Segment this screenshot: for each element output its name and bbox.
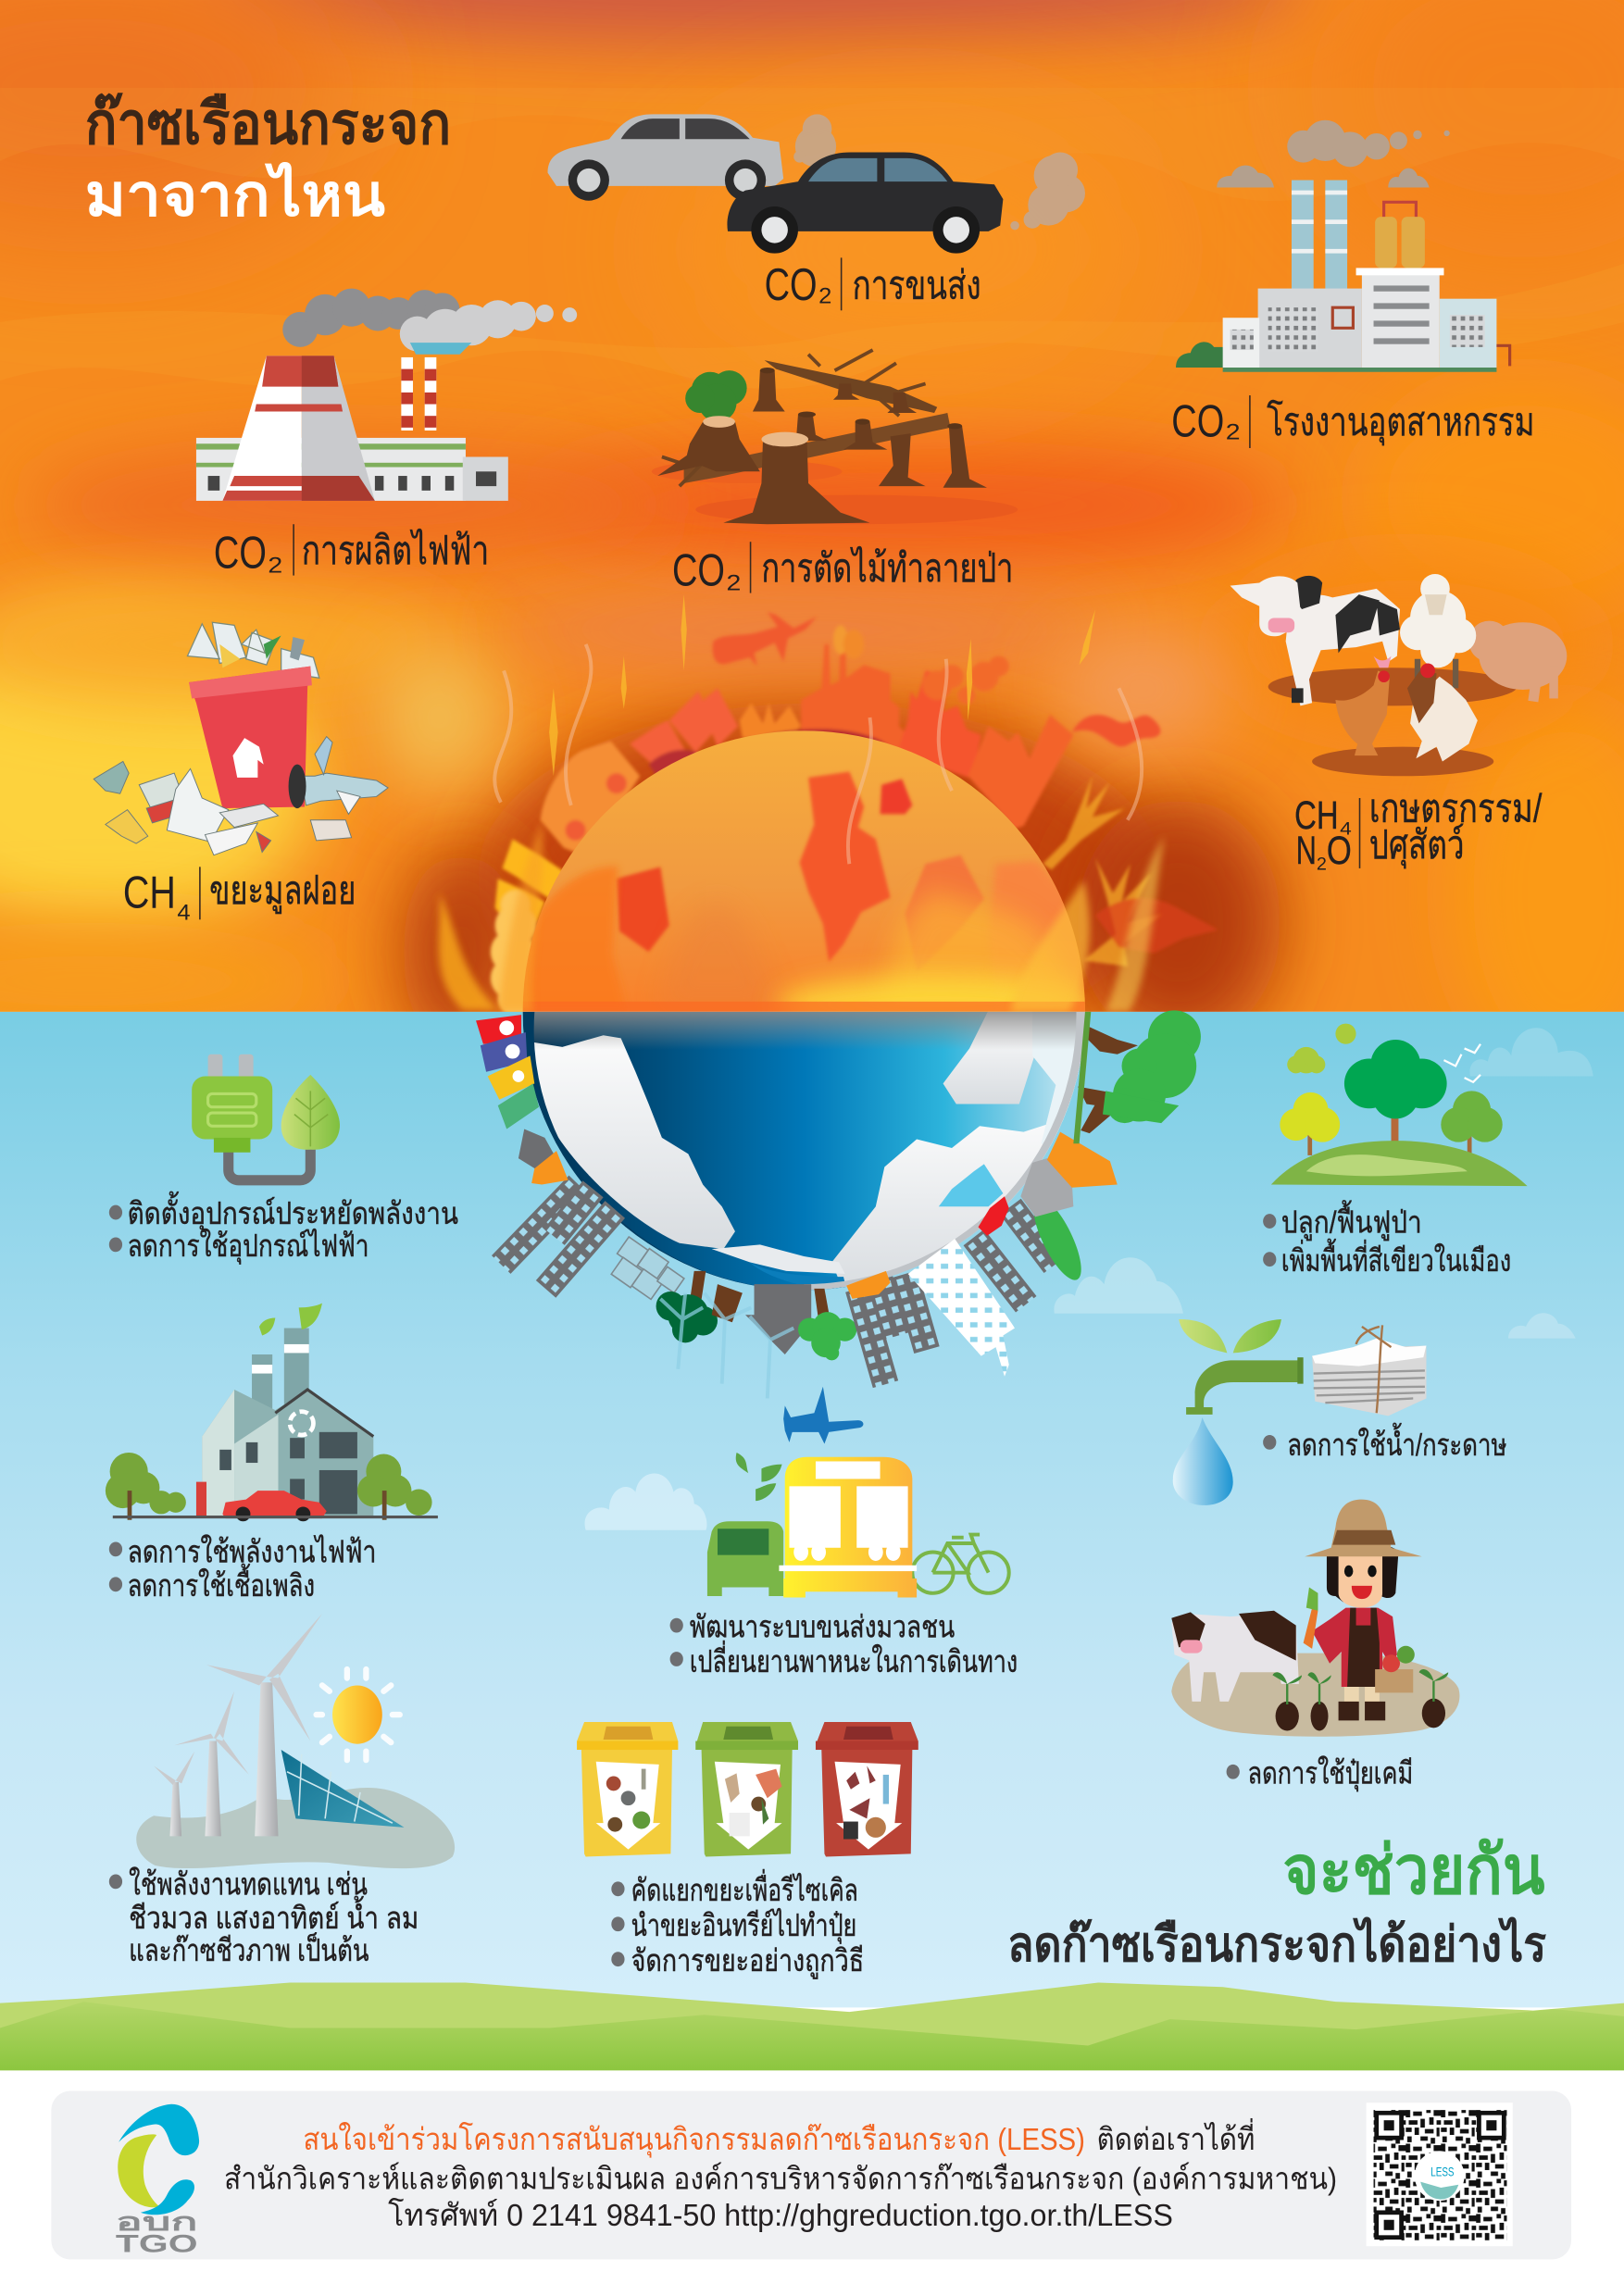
label: waste: ขยะมูลฝอย: [209, 868, 356, 915]
icon: industrial factory: [1176, 120, 1510, 372]
solar panels: [611, 1237, 684, 1299]
yellow bin: [577, 1722, 678, 1856]
label: agriculture and livestock: CH: [1294, 793, 1339, 838]
text: reduce electricity and fuel: ลดการใช้เชื้อเพลิง: [128, 1563, 315, 1603]
label: agriculture and livestock: O: [1327, 829, 1352, 873]
label: transport: การขนส่ง: [852, 264, 981, 308]
pig: [1468, 621, 1567, 702]
flames and heat wisps: [439, 594, 1164, 1012]
cow: [1230, 576, 1400, 705]
icon: power plant: [196, 289, 577, 501]
contact text: สำนักวิเคราะห์และติดตามประเมินผล องค์การบริหารจัดการก๊าซเรือนกระจก (องค์การมหาชน): [224, 2163, 1337, 2197]
footer panel: [51, 2091, 1571, 2259]
QR code: LESS: [1430, 2165, 1455, 2179]
sky clouds: [585, 1028, 1593, 1530]
orange car on globe: [846, 1271, 891, 1299]
contact text: โทรศัพท์ 0 2141 9841-50 http://ghgreduction.tgo.or.th/LESS: [388, 2198, 1173, 2233]
buildings: bottom: [845, 1270, 940, 1388]
text: public transport: [670, 1610, 1018, 1679]
faint turbines below globe: [660, 1293, 793, 1398]
label: electricity: [214, 524, 489, 579]
label: agriculture and livestock: ปศุสัตว์: [1369, 823, 1465, 869]
text: waste sorting: จัดการขยะอย่างถูกวิธี: [631, 1944, 864, 1979]
gray house: [745, 1284, 811, 1354]
label: deforestation: CO: [672, 546, 725, 596]
text: renewable energy: [109, 1867, 418, 1968]
farmer figure: [1305, 1500, 1422, 1720]
icon: deforestation stumps: [652, 350, 1018, 524]
TGO logo: TGO: [116, 2230, 198, 2258]
text: reduce electricity and fuel: ลดการใช้พลังงานไฟฟ้า: [128, 1535, 376, 1570]
icon: blue airplane: [783, 1387, 863, 1443]
text: renewable energy: และก๊าซชีวภาพ เป็นต้น: [129, 1932, 369, 1968]
label: agriculture and livestock: เกษตรกรรม/: [1369, 786, 1543, 830]
green tree bottom: [798, 1289, 856, 1360]
red bin: [816, 1722, 918, 1856]
title: ก๊าซเรือนกระจก: [85, 92, 451, 156]
TGO logo: อบก: [116, 2208, 198, 2236]
text: waste sorting: นำขยะอินทรีย์ไปทำปุ๋ย: [631, 1908, 856, 1944]
city ring around lower globe: [476, 1010, 1201, 1398]
chickens: [1335, 670, 1390, 755]
text: waste sorting: [611, 1869, 864, 1979]
red car on globe: [979, 1196, 1009, 1236]
heading: how to reduce greenhouse gases: ลดก๊าซเรือนกระจกได้อย่างไร: [1007, 1916, 1546, 1972]
icon: black car and exhaust: [727, 153, 1085, 254]
label: electricity: 2: [268, 554, 282, 578]
icon: green factory: [106, 1304, 438, 1521]
label: deforestation: การตัดไม้ทำลายป่า: [761, 545, 1013, 591]
continent: upper right landmass: [943, 1010, 1037, 1104]
text: energy saving: ลดการใช้อุปกรณ์ไฟฟ้า: [128, 1229, 369, 1265]
footer background: [0, 2070, 1624, 2296]
buildings: right: [964, 1192, 1091, 1313]
label: waste: 4: [177, 901, 191, 925]
icon: plug and leaf: [192, 1054, 340, 1180]
icon: trees on hill: [1271, 1024, 1528, 1186]
icon: three sorting bins: [577, 1722, 918, 1856]
label: electricity: การผลิตไฟฟ้า: [302, 528, 489, 573]
label: transport: CO: [765, 260, 818, 310]
text: reforest: ปลูก/ฟื้นฟูป่า: [1281, 1200, 1422, 1242]
trees top right: [1073, 1010, 1201, 1143]
text: reforest: [1263, 1200, 1511, 1279]
label: electricity: CO: [214, 529, 267, 579]
icon: silver car and exhaust: [548, 114, 836, 201]
buildings: left: [492, 1176, 625, 1298]
panel: sky background (how to reduce): [0, 1012, 1624, 2007]
lake: [939, 1164, 1003, 1206]
label: factory: โรงงานอุตสาหกรรม: [1267, 399, 1535, 446]
TGO logo: [116, 2104, 199, 2258]
lower globe: earth with continents: [519, 1010, 1090, 1296]
text: energy saving: [109, 1191, 458, 1265]
text: public transport: เปลี่ยนยานพาหนะในการเดินทาง: [690, 1641, 1018, 1679]
contact text: สนใจเข้าร่วมโครงการสนับสนุนกิจกรรมลดก๊าซเรือนกระจก (LESS): [303, 2122, 1085, 2158]
icon: public transport bus, car, bicycle: [707, 1453, 1009, 1598]
title: มาจากไหน: [85, 162, 385, 229]
text: reduce electricity and fuel: [109, 1535, 376, 1603]
label: waste: [123, 867, 356, 925]
green hills: [0, 1983, 1624, 2070]
icon: overflowing trash bin: [94, 622, 388, 855]
icon: faucet, sprout, newspaper, water drop: [1173, 1319, 1426, 1505]
text: reduce fertilizer: [1227, 1755, 1413, 1791]
burning globe: [523, 730, 1098, 1034]
contact text: ติดต่อเราได้ที่: [1097, 2118, 1255, 2157]
icon: farmer with cow: [1171, 1500, 1459, 1737]
title: [85, 92, 451, 229]
sheep: [1400, 574, 1476, 668]
continent: southern right landmass: [832, 1098, 1071, 1287]
QR code: [1367, 2103, 1513, 2246]
label: deforestation: 2: [726, 571, 741, 595]
icon: farm animals: [1230, 574, 1567, 776]
text: reduce fertilizer: ลดการใช้ปุ๋ยเคมี: [1248, 1755, 1413, 1791]
panel: fire background (where greenhouse gases come from): [0, 0, 1624, 1083]
heading: green call to action: จะช่วยกัน: [1282, 1833, 1545, 1908]
text: reforest: เพิ่มพื้นที่สีเขียวในเมือง: [1281, 1238, 1511, 1279]
label: deforestation: [672, 542, 1013, 596]
text: waste sorting: คัดแยกขยะเพื่อรีไซเคิล: [631, 1869, 858, 1908]
text: energy saving: ติดตั้งอุปกรณ์ประหยัดพลังงาน: [128, 1191, 458, 1232]
label: factory: [1171, 395, 1535, 448]
fire glow around globe: [373, 594, 1281, 1054]
trash bins on globe: [476, 1015, 539, 1129]
trees bottom left: [656, 1271, 743, 1342]
icon: wind turbines, solar panels and sun: [136, 1614, 455, 1868]
white skyscraper: [908, 1239, 1015, 1377]
houses right: [1020, 1132, 1118, 1217]
text: public transport: พัฒนาระบบขนส่งมวลชน: [690, 1610, 955, 1644]
small houses left: [518, 1129, 568, 1185]
label: factory: CO: [1171, 396, 1224, 446]
label: agriculture and livestock: 2: [1317, 855, 1327, 874]
text: reduce water and paper: [1263, 1422, 1506, 1463]
label: waste: CH: [123, 868, 176, 918]
continent: left landmass: [534, 1035, 735, 1248]
contact text: [224, 2118, 1337, 2233]
green bin: [695, 1722, 798, 1856]
label: transport: 2: [818, 284, 831, 308]
label: agriculture and livestock: N: [1296, 829, 1317, 873]
text: reduce water and paper: ลดการใช้น้ำ/กระดาษ: [1287, 1422, 1506, 1463]
text: renewable energy: ใช้พลังงานทดแทน เช่น: [129, 1867, 368, 1903]
label: factory: 2: [1226, 421, 1241, 445]
fire globe silhouettes: cities and factories: [491, 612, 1218, 1017]
label: agriculture and livestock: [1294, 786, 1543, 874]
label: agriculture and livestock: 4: [1340, 820, 1352, 840]
label: transport: [765, 257, 981, 310]
text: renewable energy: ชีวมวล แสงอาทิตย์ น้ำ ลม: [129, 1895, 418, 1936]
